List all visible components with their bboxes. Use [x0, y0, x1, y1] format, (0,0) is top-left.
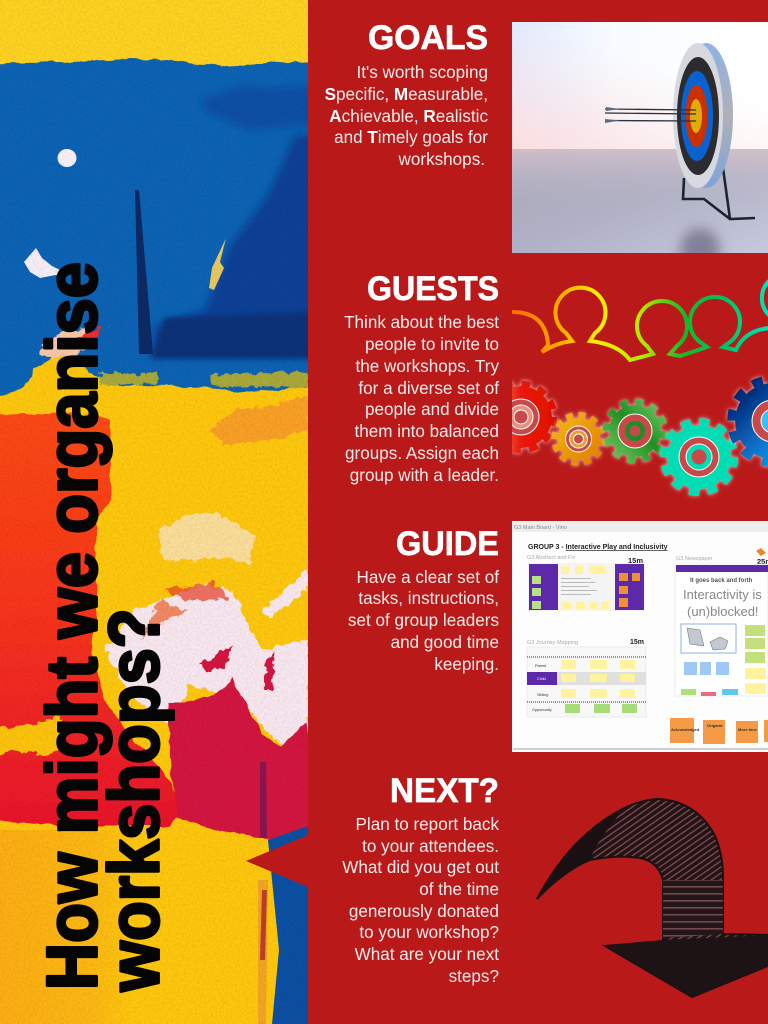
target face — [673, 43, 733, 188]
journey mapping card: 15m — [630, 639, 644, 646]
text: guests body: them into balanced — [355, 422, 499, 441]
text: guide body: and good time — [391, 633, 499, 652]
text: goals body: and Timely goals for — [334, 128, 488, 147]
image: workshop board screenshot: G3 Newspaper — [676, 556, 713, 562]
image: workshop board screenshot: G3 Main Board - Vino — [514, 525, 567, 531]
text: guests body: for a diverse set of — [358, 379, 499, 398]
text: guests body: people and divide — [365, 400, 499, 419]
heading: goals: GOALS — [368, 19, 488, 57]
text: guide body: set of group leaders — [348, 611, 499, 630]
text: goals body: Achievable, Realistic — [329, 107, 488, 126]
heading: guests: GUESTS — [367, 270, 499, 308]
text: next body: of the time — [419, 880, 499, 899]
text: guests body: groups. Assign each — [345, 444, 499, 463]
journey mapping card: G3 Journey Mapping — [527, 640, 578, 646]
arrows — [605, 107, 696, 123]
image: workshop board screenshot: Origami: — [707, 723, 723, 728]
image: workshop board screenshot: Acknowledged — [671, 727, 700, 732]
text: guide body: tasks, instructions, — [358, 589, 499, 608]
icon: row of coloured gears — [489, 380, 768, 491]
text: goals body: It's worth scoping — [356, 63, 488, 82]
abstract and fix card — [528, 563, 645, 611]
newspaper card: It goes back and forth — [690, 578, 753, 584]
board heading: GROUP 3 - Interactive Play and Inclusivity — [528, 544, 668, 551]
newspaper card: (un)blocked! — [687, 604, 759, 619]
text: guests body: group with a leader. — [350, 466, 499, 485]
section: guide — [348, 525, 499, 674]
journey mapping card: Sibling — [537, 693, 548, 697]
painting: white patches — [160, 512, 255, 565]
text: next body: What are your next — [355, 945, 499, 964]
panel: abstract painting — [0, 0, 320, 1024]
image: workshop board screenshot: More time — [738, 727, 758, 732]
title: how might we organise workshops — [34, 262, 174, 992]
image: workshop board screenshot: 15m — [628, 556, 643, 565]
text: next body: to your attendees. — [362, 837, 499, 856]
title: how might we organise workshops: How might we organise — [34, 262, 112, 990]
newspaper card: Interactivity is — [683, 587, 762, 602]
section: goals — [325, 19, 488, 169]
text: guide body: Have a clear set of — [356, 568, 499, 587]
journey mapping card: Opportunity — [532, 708, 552, 712]
image: workshop board screenshot: G3 Abstract and Fix — [527, 555, 576, 561]
newspaper card — [675, 564, 768, 696]
text: guests body: Think about the best — [344, 313, 499, 332]
heading: guide: GUIDE — [396, 525, 499, 563]
journey mapping card — [527, 639, 646, 717]
icon: outlined row of people — [512, 280, 768, 360]
section: next — [342, 772, 499, 986]
orange sticky notes — [670, 718, 768, 744]
text: next body: generously donated — [349, 902, 499, 921]
gear: blue — [732, 380, 768, 462]
text: guide body — [348, 568, 499, 674]
journey mapping card: Parent — [535, 664, 547, 668]
title: how might we organise workshops: workshops? — [96, 608, 174, 992]
journey mapping card: Child — [537, 677, 546, 681]
text: guests body: the workshops. Try — [356, 357, 499, 376]
text: next body: What did you get out — [342, 858, 499, 877]
text: guide body: keeping. — [434, 655, 499, 674]
text: next body — [342, 815, 499, 986]
gear: green — [607, 403, 663, 459]
image: workshop board screenshot — [512, 521, 768, 752]
text: next body: steps? — [449, 967, 499, 986]
text: guests body — [344, 313, 499, 485]
gear: orange — [556, 416, 602, 462]
text: guests body: people to invite to — [365, 335, 499, 354]
text: next body: Plan to report back — [356, 815, 499, 834]
gear: teal — [665, 423, 733, 491]
target stand — [683, 168, 755, 219]
icon: hand-sketched curved black arrow — [537, 799, 768, 997]
heading: next: NEXT? — [390, 772, 499, 810]
text: goals body — [325, 63, 488, 169]
text: goals body: Specific, Measurable, — [325, 85, 488, 104]
image: archery target with arrows — [512, 22, 768, 272]
section: guests — [344, 270, 499, 485]
text: goals body: workshops. — [398, 150, 485, 169]
text: next body: to your workshop? — [359, 923, 499, 942]
notch: red banner arrow pointing into painting — [246, 835, 308, 887]
gear: red — [489, 385, 553, 449]
